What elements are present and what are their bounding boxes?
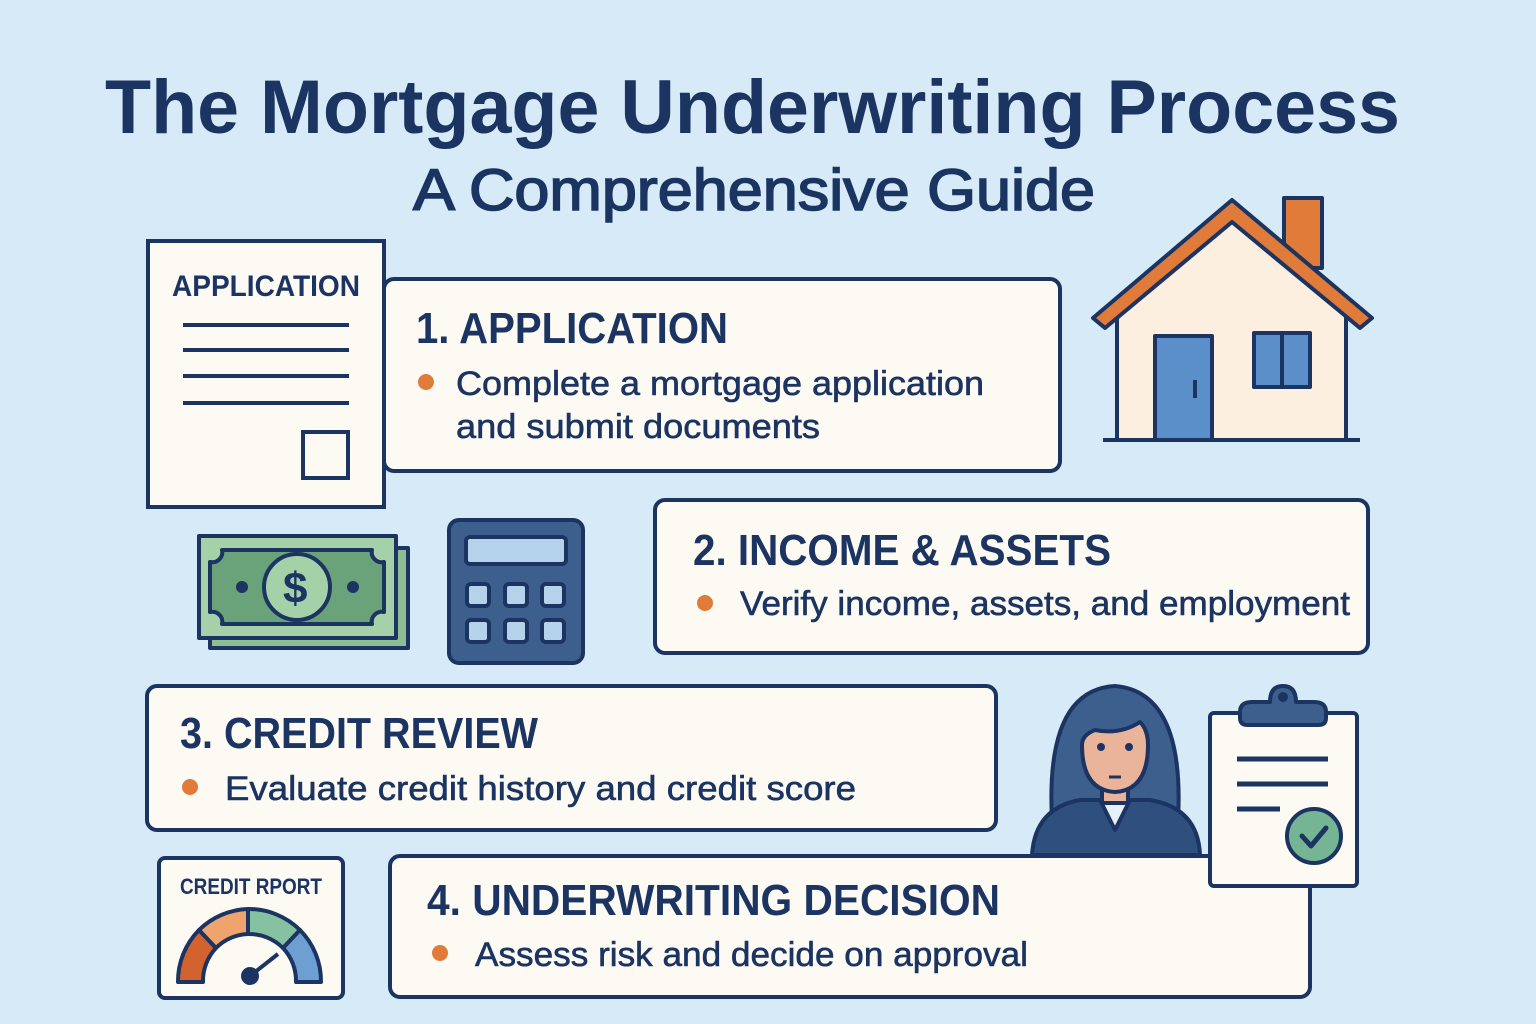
panel: 2 income & assets: 2. INCOME & ASSETS xyxy=(693,526,1111,575)
panel: 4 underwriting decision: 4. UNDERWRITING DECISION xyxy=(427,876,1000,925)
panel: 1 application xyxy=(384,279,1060,471)
subtitle: A Comprehensive Guide xyxy=(413,158,1095,223)
icon: clipboard with check xyxy=(1210,686,1357,886)
panel: 2 income & assets xyxy=(655,500,1368,653)
icon: application document: APPLICATION xyxy=(172,270,360,303)
panel: 2 income & assets: Verify income, assets, and employment xyxy=(740,585,1351,623)
title: The Mortgage Underwriting Process xyxy=(105,65,1400,150)
panel: 1 application: and submit documents xyxy=(456,408,820,446)
panel: 4 underwriting decision: Assess risk and decide on approval xyxy=(475,936,1028,974)
panel: 3 credit review xyxy=(147,686,996,830)
icon: application document xyxy=(148,241,384,507)
icon: money xyxy=(199,536,408,648)
panel: 4 underwriting decision xyxy=(390,856,1310,997)
panel: 1 application: Complete a mortgage application xyxy=(456,365,984,403)
icon: credit report gauge xyxy=(159,858,343,998)
icon: calculator xyxy=(449,520,583,663)
panel: 1 application: 1. APPLICATION xyxy=(416,304,728,353)
icon: underwriter person xyxy=(1032,686,1200,855)
icon: credit report gauge: CREDIT RPORT xyxy=(180,874,322,899)
panel: 3 credit review: Evaluate credit history and credit score xyxy=(225,770,856,808)
icon: money: $ xyxy=(283,564,307,613)
icon: house xyxy=(1093,198,1372,440)
panel: 3 credit review: 3. CREDIT REVIEW xyxy=(180,709,538,758)
